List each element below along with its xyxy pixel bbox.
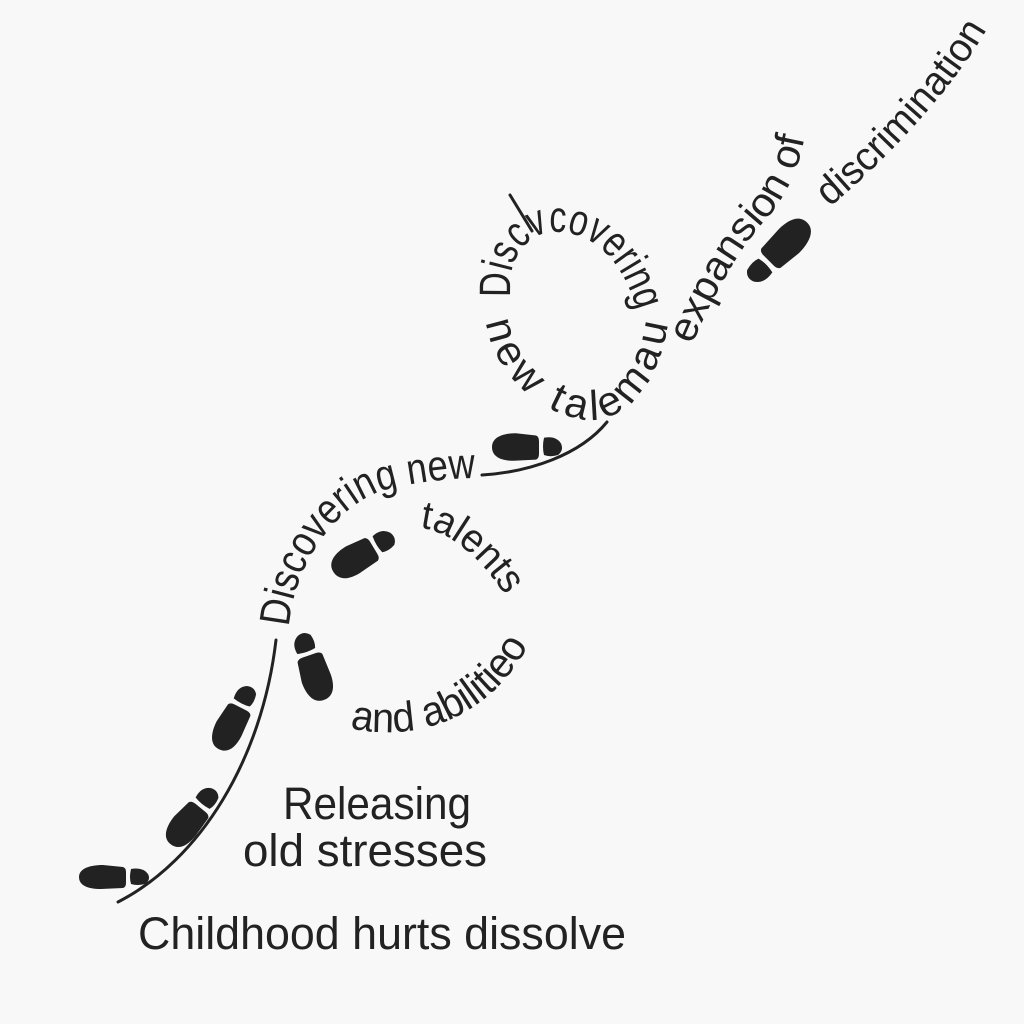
footprint 6 [492, 433, 562, 461]
curved text: new talemau: new talemau [486, 319, 668, 420]
footprint 2 [159, 781, 226, 853]
footprint 5 [325, 523, 401, 584]
text: Releasing old stresses: old stresses [243, 825, 487, 876]
footprint 1 [79, 865, 149, 889]
curved text: discrimination: discrimination [820, 22, 986, 204]
curved text: and abilities: and abilitieo [352, 638, 525, 732]
text: Releasing old stresses: Releasing [283, 778, 471, 829]
footprint 7 [739, 212, 818, 291]
path line: middle [482, 422, 607, 475]
footprint 4 [287, 629, 338, 705]
curved text: Discovering new: Discovering new [260, 455, 474, 624]
footprint 3 [206, 680, 263, 756]
stray stroke over the c [510, 195, 532, 231]
path line: lower [118, 640, 276, 902]
curved text: upper Discovering: Discvcovering [480, 208, 658, 310]
curved text: Expansion of: expansion of [675, 132, 804, 340]
text: Releasing old stresses [243, 778, 487, 876]
curved text: talents: talents [423, 503, 520, 592]
heading: Childhood hurts dissolve: Childhood hurts dissolve [138, 908, 626, 959]
